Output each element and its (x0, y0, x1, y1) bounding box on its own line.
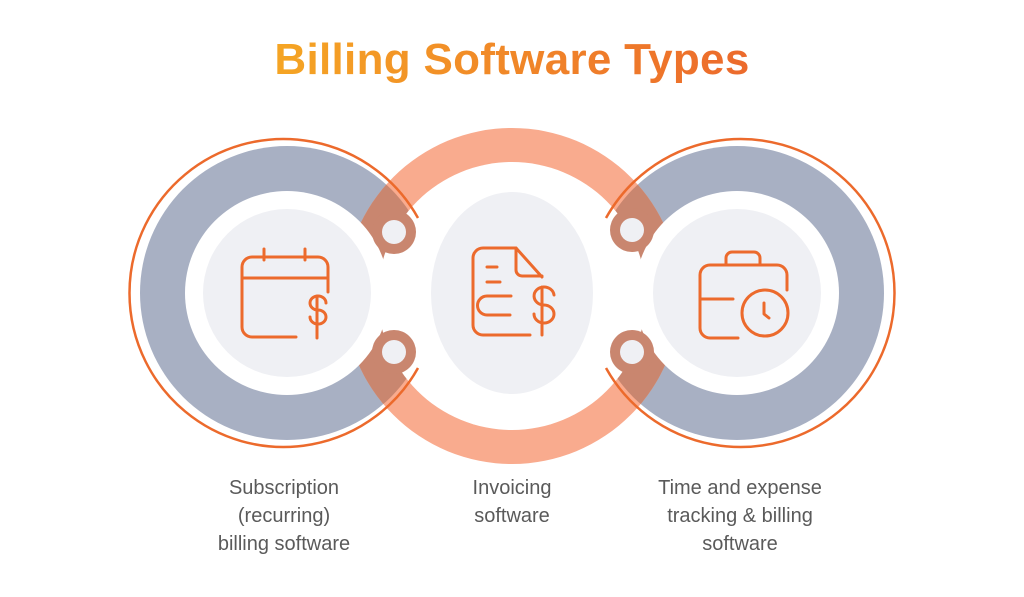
label: subscription: billing software (218, 533, 350, 555)
label: time and expense: Time and expense (658, 477, 822, 499)
ring: right grey (590, 146, 884, 440)
inner discs (203, 209, 371, 377)
icon: invoice dollar (473, 248, 554, 335)
pins (372, 208, 654, 374)
label: invoicing: Invoicing (473, 477, 551, 499)
label: time and expense (658, 477, 822, 555)
overlap lenses (359, 184, 665, 404)
label: invoicing: software (474, 505, 550, 527)
label: time and expense: tracking & billing (667, 505, 813, 527)
ring: left grey (140, 146, 434, 440)
label: time and expense: software (702, 533, 778, 555)
outline arcs (129, 139, 895, 447)
ring: middle orange (344, 128, 680, 464)
label: subscription (218, 477, 350, 555)
icon: briefcase clock (700, 252, 788, 338)
title: Billing Software Types (274, 35, 750, 84)
icon: calendar dollar (242, 249, 328, 338)
diagram: three linked rings (128, 128, 896, 464)
label: invoicing (473, 477, 551, 527)
label: subscription: Subscription (229, 477, 339, 499)
label: subscription: (recurring) (238, 505, 330, 527)
